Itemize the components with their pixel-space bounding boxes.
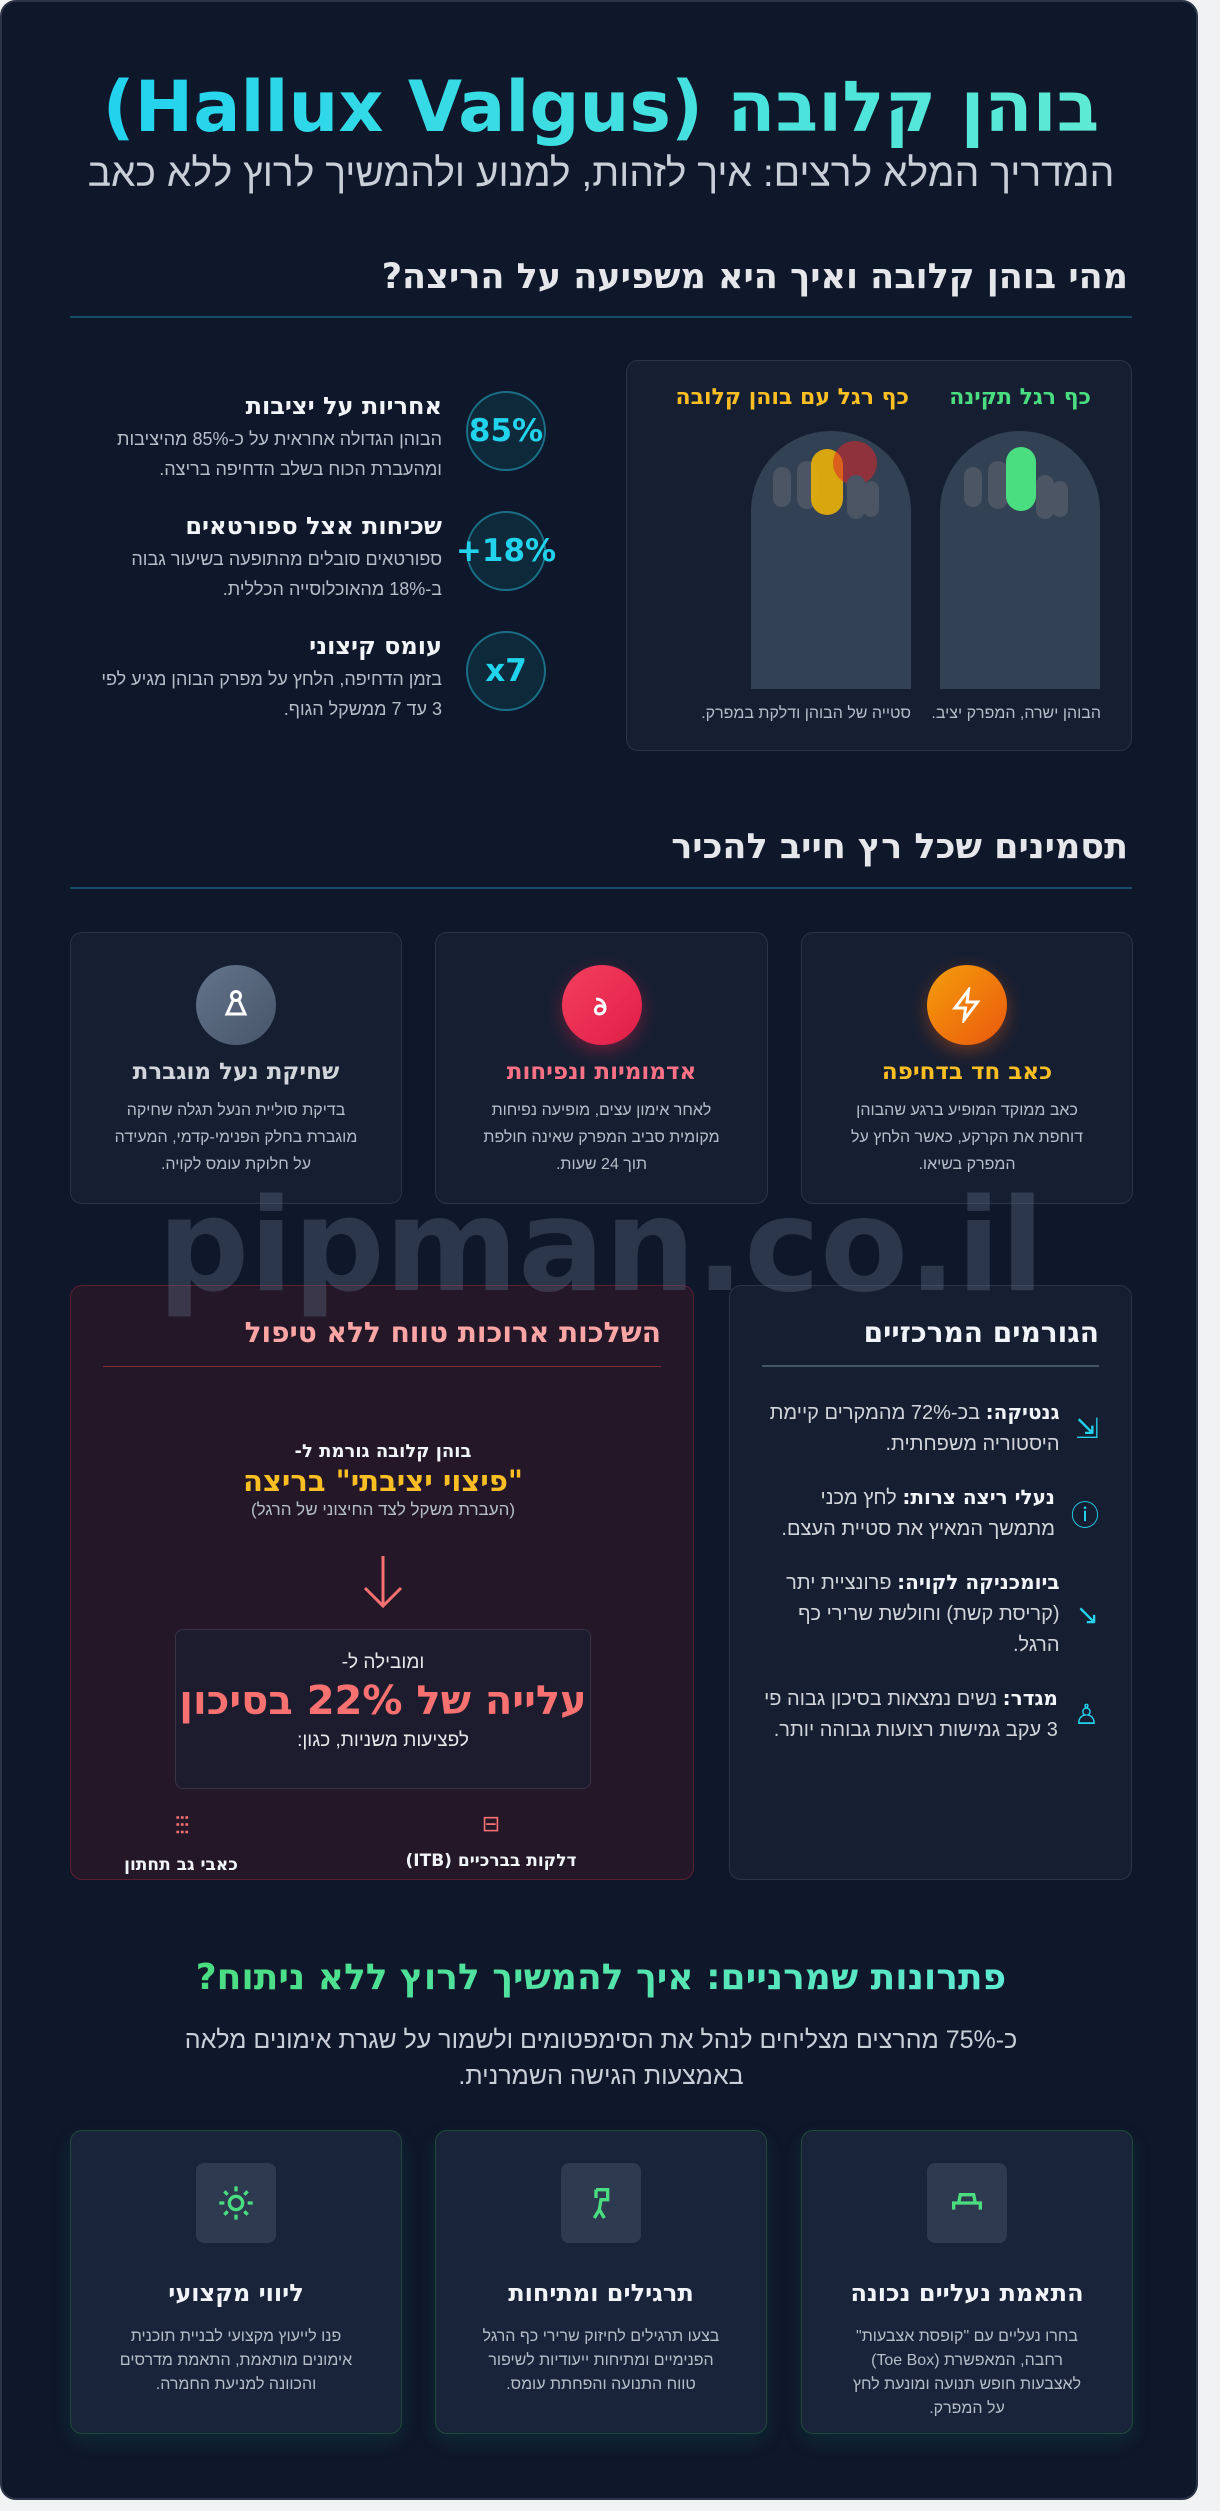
icon: flame xyxy=(562,965,642,1045)
text: causes instability: בוהן קלובה גורמת ל- xyxy=(295,1441,471,1462)
factor genetics: גנטיקה: בכ-72% מהמקרים קיימת היסטוריה משפחתית. xyxy=(770,1400,1060,1455)
stat 85: הבוהן הגדולה אחראית על כ-85% מהיציבות ומהעברת הכוח בשלב הדחיפה בריצה. xyxy=(117,429,442,479)
heading: what is bunion: מהי בוהן קלובה ואיך היא משפיעה על הריצה? xyxy=(382,257,1128,297)
factor genetics: ⇲ xyxy=(1076,1413,1099,1444)
text: causes instability: "פיצוי יציבתי" בריצה xyxy=(243,1464,523,1498)
stat 85 xyxy=(117,392,442,479)
card: shoe wear: בדיקת סוליית הנעל תגלה שחיקה מוגברת בחלק הפנימי-קדמי, המעידה על חלוקת עומס לקויה. xyxy=(115,1102,357,1173)
risk box xyxy=(175,1629,591,1789)
factor biomechanics: ↘ xyxy=(1076,1598,1099,1630)
card: sharp pain: כאב חד בדחיפה xyxy=(882,1059,1052,1085)
card: sharp pain xyxy=(801,932,1133,1204)
icon: shoe xyxy=(196,965,276,1045)
subtitle solutions: כ-75% מהרצים מצליחים לנהל את הסימפטומים ולשמור על שגרת אימונים מלאה באמצעות הגישה השמרנית. xyxy=(185,2026,1017,2090)
circle 18 xyxy=(466,511,546,591)
card: redness: לאחר אימון עצים, מופיעה נפיחות מקומית סביב המפרק שאינה חולפת תוך 24 שעות. xyxy=(483,1102,720,1173)
card: redness xyxy=(435,932,768,1204)
factor biomechanics: ביומכניקה לקויה: פרונציית יתר (קריסת קשת) וחולשת שרירי כף הרגל. xyxy=(786,1570,1060,1656)
factor shoes: ⓘ xyxy=(1071,1500,1099,1530)
circle 18: +18% xyxy=(456,533,556,569)
item: ITB xyxy=(406,1811,576,1871)
panel: main factors xyxy=(729,1285,1132,1880)
card: exercises: בצעו תרגילים לחיזוק שרירי כף הרגל הפנימיים ומתיחות ייעודיות לשיפור טווח התנועה והפחתת עומס. xyxy=(483,2328,719,2393)
card: redness: אדמומיות ונפיחות xyxy=(507,1059,696,1085)
item: back pain xyxy=(124,1811,238,1875)
card: sharp pain: כאב ממוקד המופיע ברגע שהבוהן דוחפת את הקרקע, כאשר הלחץ על המפרק בשיאו. xyxy=(851,1102,1083,1173)
icon: shoe xyxy=(927,2163,1007,2243)
heading: symptoms: תסמינים שכל רץ חייב להכיר xyxy=(671,827,1128,867)
risk box: עלייה של 22% בסיכון xyxy=(179,1678,587,1724)
item: back pain: כאבי גב תחתון xyxy=(124,1855,238,1875)
icon: sun xyxy=(196,2163,276,2243)
stat 18: שכיחות אצל ספורטאים xyxy=(185,512,442,540)
panel: foot comparison xyxy=(626,360,1132,751)
item: back pain: ⫶⫶⫶ xyxy=(174,1811,188,1841)
text: causes instability xyxy=(243,1441,523,1519)
icon: bolt xyxy=(927,965,1007,1045)
card: shoe wear xyxy=(70,932,402,1204)
text: causes instability: (העברת משקל לצד החיצוני של הרגל) xyxy=(251,1500,515,1519)
card: exercises xyxy=(435,2130,767,2434)
foot bunion xyxy=(751,431,911,689)
heading consequences: השלכות ארוכות טווח ללא טיפול xyxy=(245,1316,661,1349)
card: shoes xyxy=(801,2130,1133,2434)
heading factors: הגורמים המרכזיים xyxy=(864,1316,1099,1349)
foot normal xyxy=(940,431,1100,689)
circle 85 xyxy=(466,391,546,471)
circle x7 xyxy=(466,631,546,711)
item: ITB: דלקות בברכיים (ITB) xyxy=(406,1851,576,1871)
card: professional: פנו לייעוץ מקצועי לבניית תוכנית אימונים מותאמת, התאמת מדרסים והכוונה למניעת החמרה. xyxy=(120,2328,352,2393)
card: shoe wear: שחיקת נעל מוגברת xyxy=(133,1059,339,1085)
stats xyxy=(101,391,556,719)
factor shoes: נעלי ריצה צרות: לחץ מכני מתמשך המאיץ את סטיית העצם. xyxy=(781,1485,1055,1540)
card: shoes: התאמת נעליים נכונה xyxy=(850,2279,1084,2307)
caption bunion: סטייה של הבוהן ודלקת במפרק. xyxy=(701,705,911,722)
risk box: ומובילה ל- xyxy=(342,1652,424,1673)
stat 18 xyxy=(131,512,442,599)
watermark: pipman.co.il xyxy=(158,1172,1044,1321)
factor gender: מגדר: נשים נמצאות בסיכון גבוה פי 3 עקב גמישות רצועות גבוהה יותר. xyxy=(764,1686,1058,1741)
card: professional: ליווי מקצועי xyxy=(168,2279,304,2307)
card: professional xyxy=(70,2130,402,2434)
circle 85: 85% xyxy=(469,413,543,449)
stat 85: אחריות על יציבות xyxy=(246,392,442,420)
subtitle: המדריך המלא לרצים: איך לזהות, למנוע ולהמשיך לרוץ ללא כאב xyxy=(88,152,1114,195)
label bunion: כף רגל עם בוהן קלובה xyxy=(675,385,909,410)
icon: exercise xyxy=(561,2163,641,2243)
card: exercises: תרגילים ומתיחות xyxy=(508,2279,694,2307)
stat x7: בזמן הדחיפה, הלחץ על מפרק הבוהן מגיע לפי 3 עד 7 ממשקל הגוף. xyxy=(101,669,442,719)
stat 18: ספורטאים סובלים מהתופעה בשיעור גבוה ב-18% מהאוכלוסייה הכללית. xyxy=(131,549,442,599)
circle x7: x7 xyxy=(485,653,527,689)
risk box: לפציעות משניות, כגון: xyxy=(297,1730,469,1751)
stat x7: עומס קיצוני xyxy=(309,632,442,660)
factor gender: ♙ xyxy=(1074,1699,1099,1730)
stat x7 xyxy=(101,632,442,719)
arrow down xyxy=(364,1556,402,1608)
heading: conservative solutions: פתרונות שמרניים: איך להמשיך לרוץ ללא ניתוח? xyxy=(196,1957,1006,1998)
card: shoes: בחרו נעליים עם "קופסת אצבעות" רחבה, המאפשרת (Toe Box) לאצבעות חופש תנועה ומונעת לחץ על המפרק. xyxy=(853,2328,1081,2417)
title: בוהן קלובה (Hallux Valgus) xyxy=(103,66,1099,148)
caption normal: הבוהן ישרה, המפרק יציב. xyxy=(931,705,1101,722)
panel: long-term consequences xyxy=(70,1285,694,1880)
label normal: כף רגל תקינה xyxy=(949,385,1091,410)
item: ITB: ⊟ xyxy=(482,1811,500,1836)
